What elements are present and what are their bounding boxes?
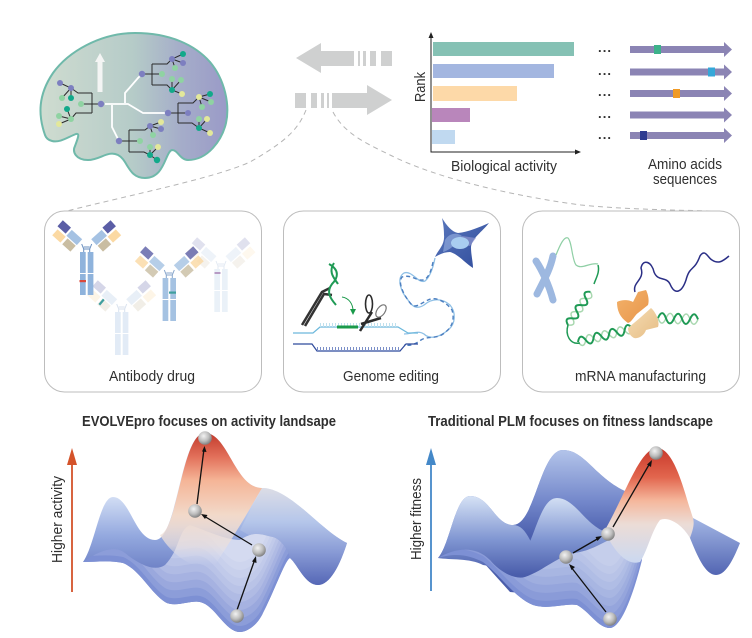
- arrow: grey pointing left: [296, 43, 392, 73]
- icon: scissors: [360, 295, 388, 331]
- right slope: [240, 488, 347, 585]
- icon: small green DNA: [329, 263, 338, 305]
- back ridge: [500, 450, 640, 570]
- tree nodes: teal: [64, 51, 213, 163]
- black subtree connectors: [59, 54, 211, 160]
- label: amino acids sequences: sequences: [653, 172, 717, 188]
- panel label: Genome editing: [343, 369, 439, 385]
- dashed connector right: [333, 112, 712, 211]
- spheres: [559, 446, 663, 626]
- arrowheads: [569, 460, 652, 570]
- panel label: Antibody drug: [109, 369, 195, 385]
- spheres: [188, 431, 266, 623]
- bars: [432, 42, 574, 144]
- ellipsis dots: ...: [598, 40, 611, 55]
- icon: ribosome small subunit: [617, 290, 649, 323]
- x axis label: Biological activity: [451, 159, 558, 175]
- front sheet with bands: [83, 530, 290, 632]
- heading: EVOLVEpro: EVOLVEpro focuses on activity landsape: [82, 413, 336, 430]
- bar chart: rank vs biological activity: [413, 32, 581, 175]
- axis: higher activity: [50, 448, 77, 592]
- icon: antibody left: [52, 220, 121, 295]
- ellipsis dots: ...: [598, 127, 611, 142]
- green helix: lower: [577, 324, 633, 346]
- icon: cell: [435, 218, 489, 268]
- red fitness peak: [605, 448, 694, 563]
- DNA bubble: top strand: [293, 327, 418, 333]
- DNA strand: [400, 258, 454, 345]
- green guide segment: [337, 326, 358, 328]
- icon: pale antibody centre: [87, 280, 156, 355]
- icon: antibody middle: [135, 246, 204, 321]
- heading: Traditional PLM: Traditional PLM focuses on fitness landscape: [428, 413, 713, 430]
- panel: genome editing: [284, 211, 500, 392]
- base-pair ticks lower: [317, 347, 400, 351]
- ellipsis dots: ...: [598, 84, 611, 99]
- tree nodes: purple: [57, 56, 191, 144]
- mutation marks: [640, 45, 715, 140]
- label: amino acids sequences: Amino acids: [648, 157, 722, 173]
- arrowheads: [201, 446, 256, 563]
- far right slope: [680, 508, 740, 575]
- panel frame: [44, 211, 262, 392]
- front sheet with bands: [438, 540, 642, 628]
- axes: [431, 36, 577, 152]
- middle hill: [465, 498, 640, 600]
- axis: higher fitness: [409, 448, 436, 591]
- ellipsis dots: ...: [598, 63, 611, 78]
- red activity peak: [160, 433, 262, 567]
- white tree branches: [105, 74, 168, 141]
- left hill: [438, 496, 545, 575]
- base-pair ticks upper: [320, 323, 398, 327]
- icon: ribosome large subunit: [628, 308, 659, 338]
- panel: mRNA manufacturing: [522, 211, 740, 392]
- panel frame: [522, 211, 740, 392]
- search path arrows: [571, 463, 650, 612]
- fitness landscape: [438, 446, 740, 628]
- thin strand from chromosome: [556, 238, 598, 267]
- icon: white upward arrow: [95, 53, 105, 92]
- green helix: left: [565, 290, 594, 327]
- panel: antibody drug: [44, 211, 262, 392]
- amino acid sequence arrows: [630, 42, 732, 143]
- activity landscape: [83, 431, 347, 632]
- green strand connectors: [567, 265, 599, 343]
- surface base: [83, 433, 347, 632]
- tree nodes: yellow: [56, 91, 213, 150]
- y axis label: Rank: [413, 71, 429, 102]
- surface base: [438, 450, 640, 628]
- green helix: right: [658, 313, 698, 324]
- dashed connector left: [67, 110, 306, 211]
- DNA bubble: bottom strand: [293, 344, 418, 351]
- icon: forceps: [302, 288, 332, 326]
- panel: brain with search tree: [40, 33, 227, 178]
- search path arrows: [197, 449, 255, 610]
- ellipsis dots: [598, 40, 611, 142]
- axis arrowheads: [428, 32, 581, 154]
- mutation marks: [80, 272, 220, 305]
- icon: chromosome: [536, 256, 553, 300]
- panel frame: [284, 211, 500, 392]
- axis: higher fitness: Higher fitness: [409, 478, 425, 560]
- label: amino acids sequences: [648, 157, 722, 188]
- icon: pale antibody right: [187, 237, 255, 312]
- brain outline: [40, 33, 227, 178]
- axis: higher activity: Higher activity: [50, 475, 66, 563]
- arrow: grey pointing right: [295, 85, 392, 115]
- tree nodes: light green: [56, 65, 214, 150]
- purple mRNA wave: [635, 253, 729, 292]
- arrow: green curved: [342, 297, 356, 315]
- panel label: mRNA manufacturing: [575, 369, 706, 385]
- ellipsis dots: ...: [598, 106, 611, 121]
